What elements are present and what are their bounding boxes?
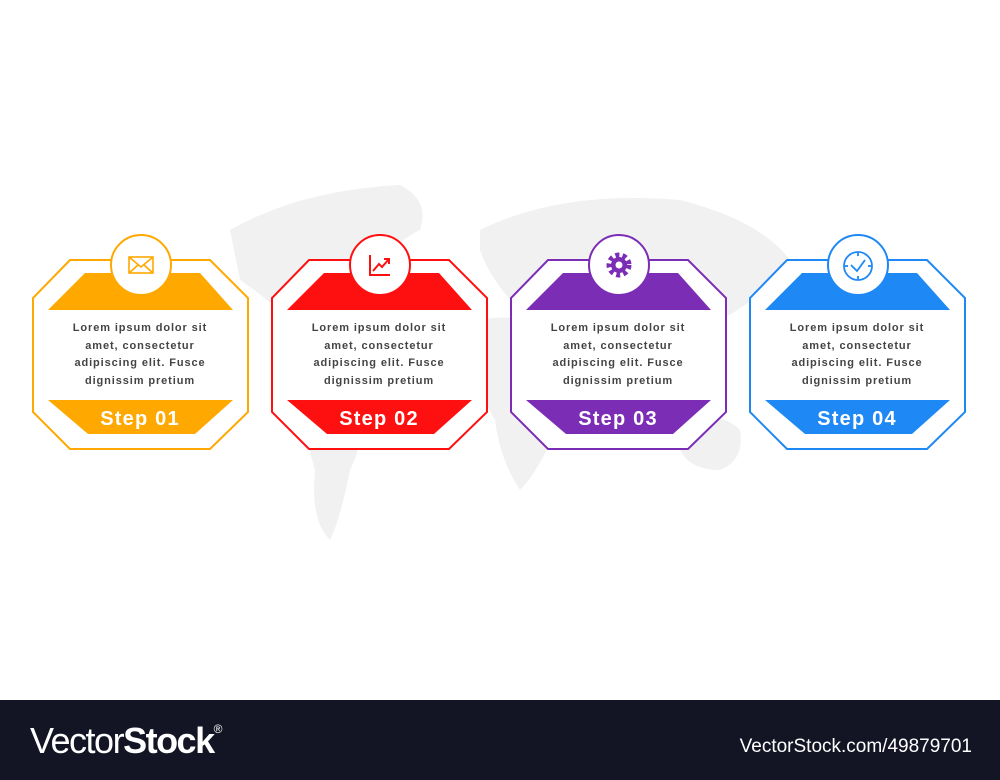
- label: Step 02: [339, 408, 419, 430]
- text block: Lorem ipsum dolor sit: [312, 322, 446, 334]
- step 2 card: [272, 235, 487, 449]
- label: Step 03: [578, 408, 658, 430]
- icon: gear: [609, 255, 629, 275]
- text block: adipiscing elit. Fusce: [313, 357, 445, 369]
- text block: dignissim pretium: [563, 375, 673, 387]
- text block: Lorem ipsum dolor sit: [790, 322, 924, 334]
- text block: adipiscing elit. Fusce: [74, 357, 206, 369]
- footer bar: [0, 700, 1000, 780]
- text block: amet, consectetur: [802, 340, 912, 352]
- label: Step 01: [100, 408, 180, 430]
- footer bar: ®: [214, 722, 223, 736]
- step 1 card: [33, 235, 248, 449]
- text block: amet, consectetur: [563, 340, 673, 352]
- text block: dignissim pretium: [802, 375, 912, 387]
- step 4 card: [750, 235, 965, 449]
- step 3 card: [511, 235, 726, 449]
- text block: Lorem ipsum dolor sit: [551, 322, 685, 334]
- label: Step 04: [817, 408, 897, 430]
- text block: amet, consectetur: [324, 340, 434, 352]
- text block: amet, consectetur: [85, 340, 195, 352]
- footer bar: VectorStock.com/49879701: [740, 736, 972, 757]
- icon: clock: [844, 252, 872, 280]
- footer bar: VectorStock: [30, 720, 214, 761]
- icon: envelope: [129, 257, 153, 273]
- text block: adipiscing elit. Fusce: [791, 357, 923, 369]
- text block: adipiscing elit. Fusce: [552, 357, 684, 369]
- text block: dignissim pretium: [324, 375, 434, 387]
- text block: dignissim pretium: [85, 375, 195, 387]
- world map background: [230, 185, 790, 540]
- text block: Lorem ipsum dolor sit: [73, 322, 207, 334]
- icon: growth chart: [370, 255, 390, 275]
